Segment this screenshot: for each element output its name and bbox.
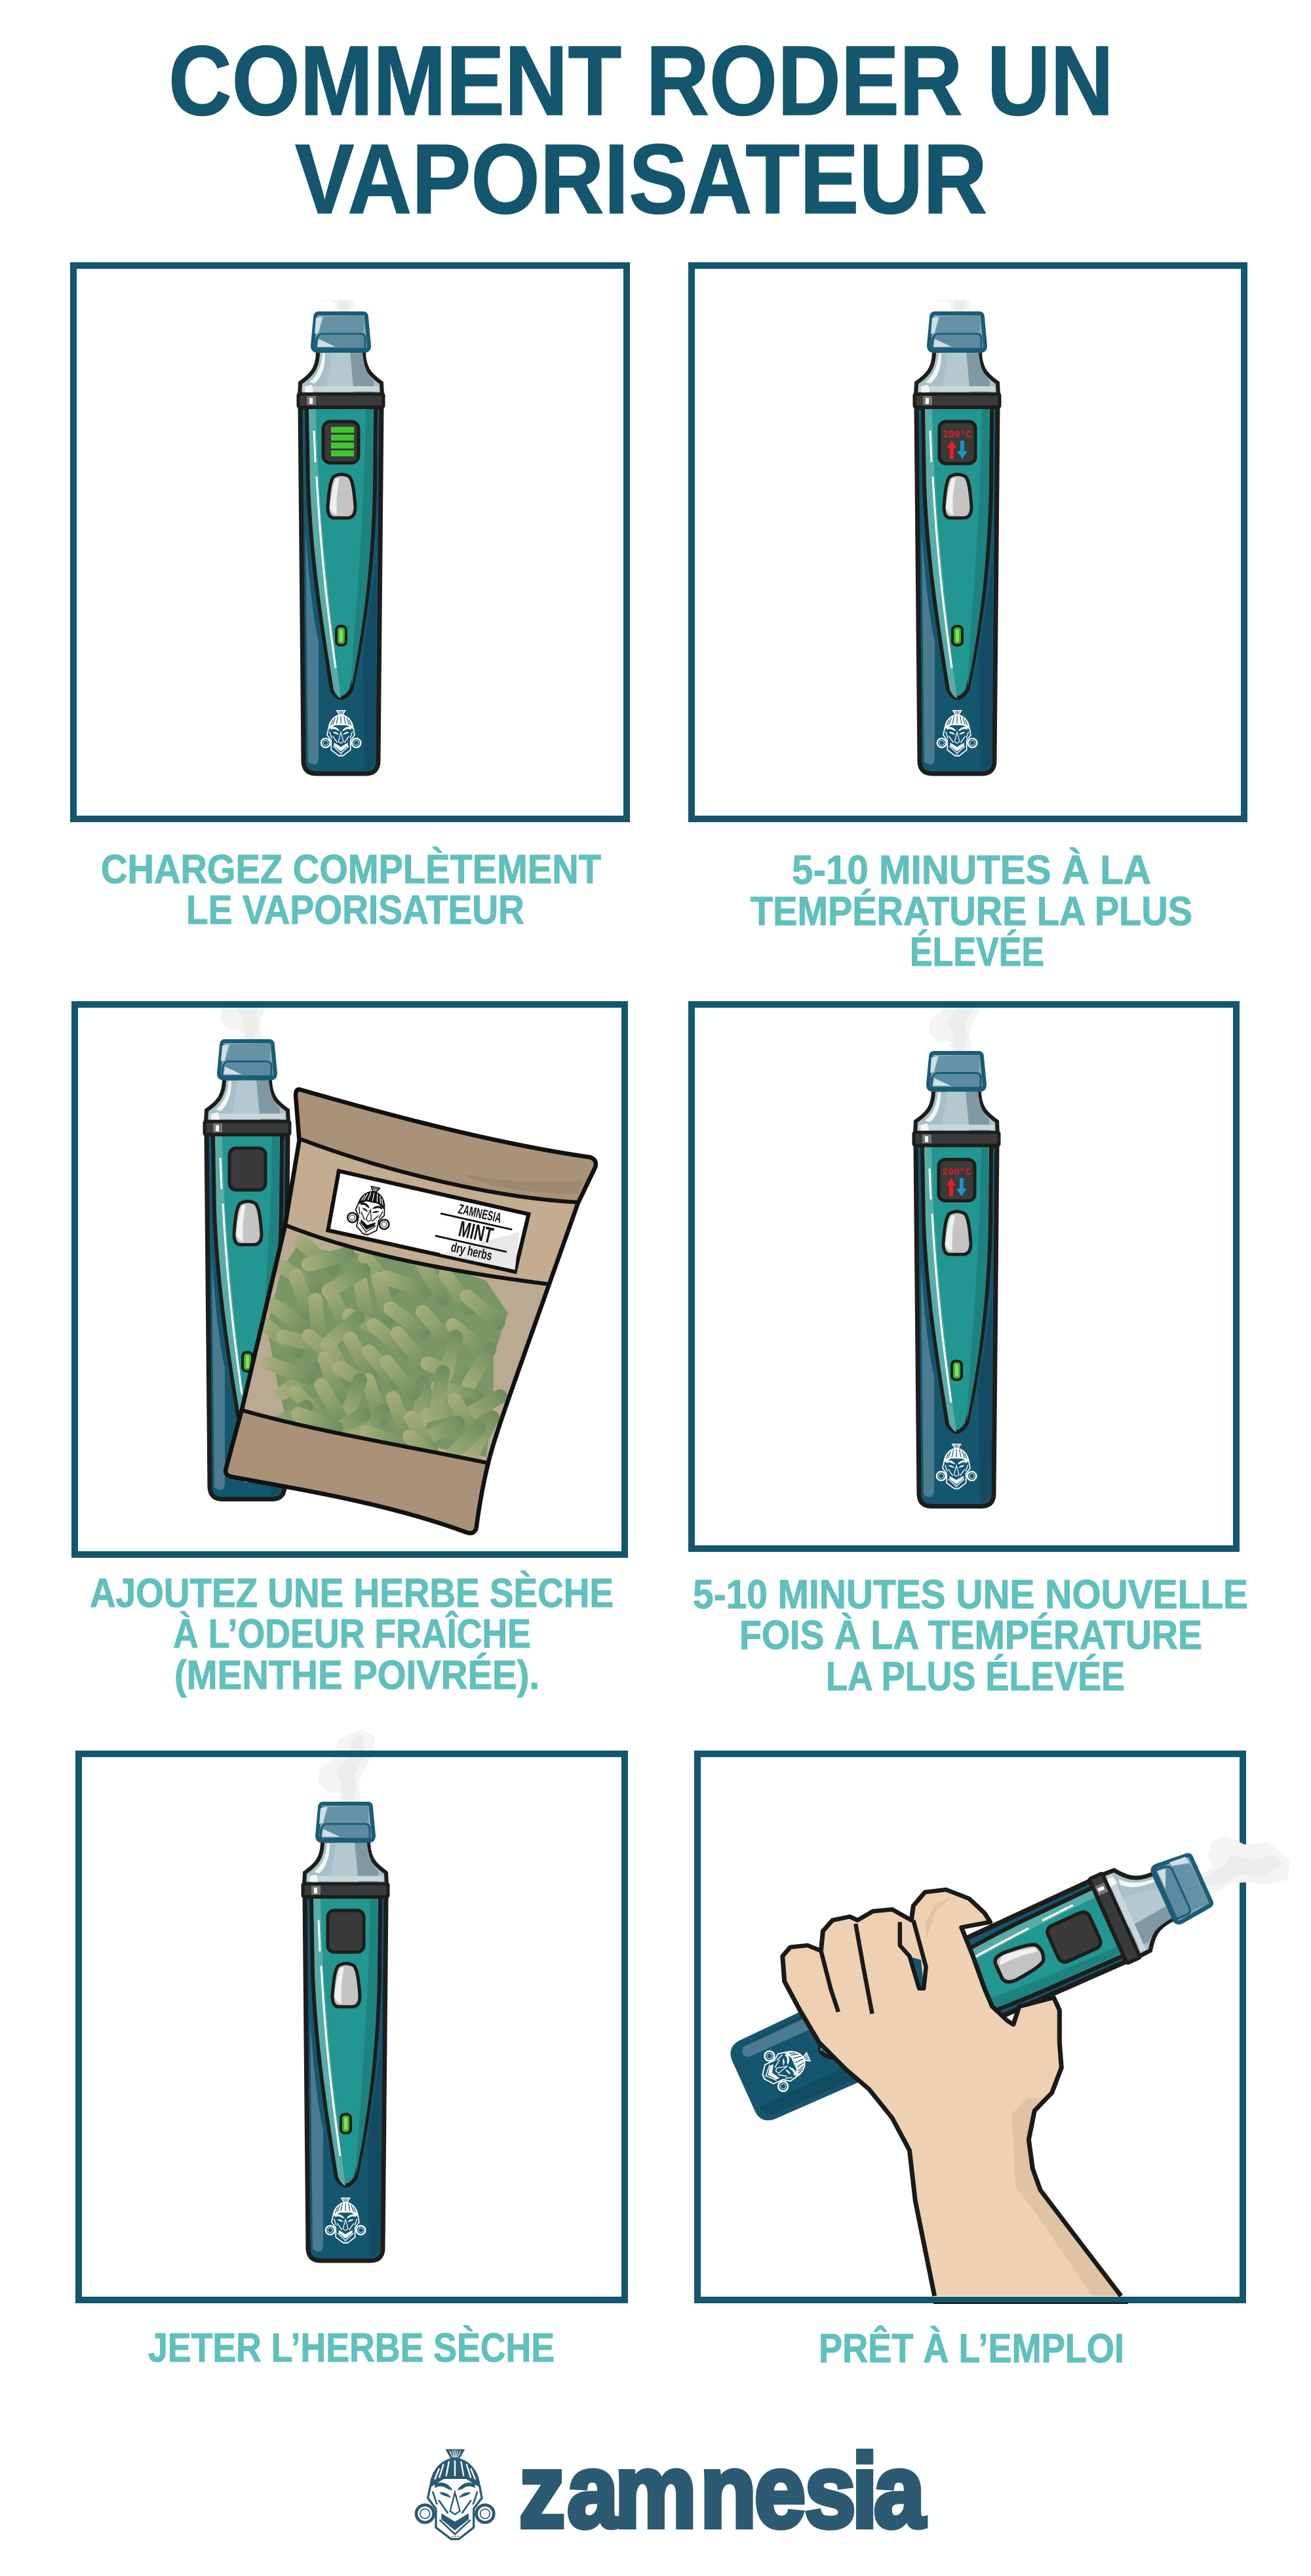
title [168, 25, 1114, 234]
smoke 2 [937, 300, 971, 311]
vaporizer with temperature screen [914, 313, 1000, 774]
caption 2: TEMPÉRATURE LA PLUS [751, 889, 1192, 934]
caption 2 [751, 848, 1192, 975]
caption 1: LE VAPORISATEUR [186, 888, 524, 933]
panel 1: charge the vaporizer [73, 239, 627, 819]
caption 4: FOIS À LA TEMPÉRATURE [739, 1613, 1202, 1658]
bag label [328, 1171, 528, 1272]
caption 4 [693, 1572, 1248, 1699]
wordmark: zamnesia [519, 2432, 926, 2549]
vaporizer with temperature screen [914, 1053, 999, 1506]
caption 1: CHARGEZ COMPLÈTEMENT [101, 847, 601, 892]
caption 2: ÉLEVÉE [910, 930, 1044, 975]
caption 6: PRÊT À L’EMPLOI [819, 2326, 1124, 2371]
caption 3 [90, 1571, 614, 1698]
panel 3: add dry herb [75, 966, 625, 1555]
caption 4: LA PLUS ÉLEVÉE [826, 1654, 1125, 1699]
panel 2: 5-10 minutes at max temperature [692, 239, 1244, 819]
bag label: dry herbs [450, 1240, 494, 1263]
vaporizer held in hand [727, 1837, 1220, 2127]
title: VAPORISATEUR [295, 123, 987, 234]
smoke 3 [220, 1008, 265, 1039]
smoke 1 [322, 300, 355, 311]
smoke 4 [929, 1008, 981, 1051]
caption 3: À L’ODEUR FRAÎCHE [173, 1612, 531, 1657]
panel 6: ready to use [697, 1754, 1297, 2304]
logo mask [416, 2449, 494, 2539]
caption 3: (MENTHE POIVRÉE). [174, 1653, 539, 1698]
herbs [262, 1235, 508, 1459]
bag label: MINT [456, 1216, 496, 1248]
hand [783, 1890, 1121, 2296]
bag label: ZAMNESIA [457, 1202, 503, 1226]
title: COMMENT RODER UN [168, 25, 1114, 136]
panel 4: 5-10 minutes again [692, 978, 1236, 1549]
footer logo [416, 2432, 926, 2549]
caption 2: 5-10 MINUTES À LA [792, 848, 1151, 893]
vaporizer [205, 1041, 290, 1499]
smoke 5 [318, 1729, 376, 1804]
herb bag [225, 1090, 596, 1533]
caption 1 [101, 847, 601, 933]
caption 3: AJOUTEZ UNE HERBE SÈCHE [90, 1571, 614, 1616]
panel 5: discard herb [79, 1754, 625, 2300]
caption 5: JETER L’HERBE SÈCHE [148, 2326, 555, 2371]
caption 4: 5-10 MINUTES UNE NOUVELLE [693, 1572, 1248, 1617]
vaporizer [303, 1804, 388, 2261]
smoke 6 [1190, 1815, 1297, 1911]
vaporizer with battery screen [298, 313, 383, 774]
